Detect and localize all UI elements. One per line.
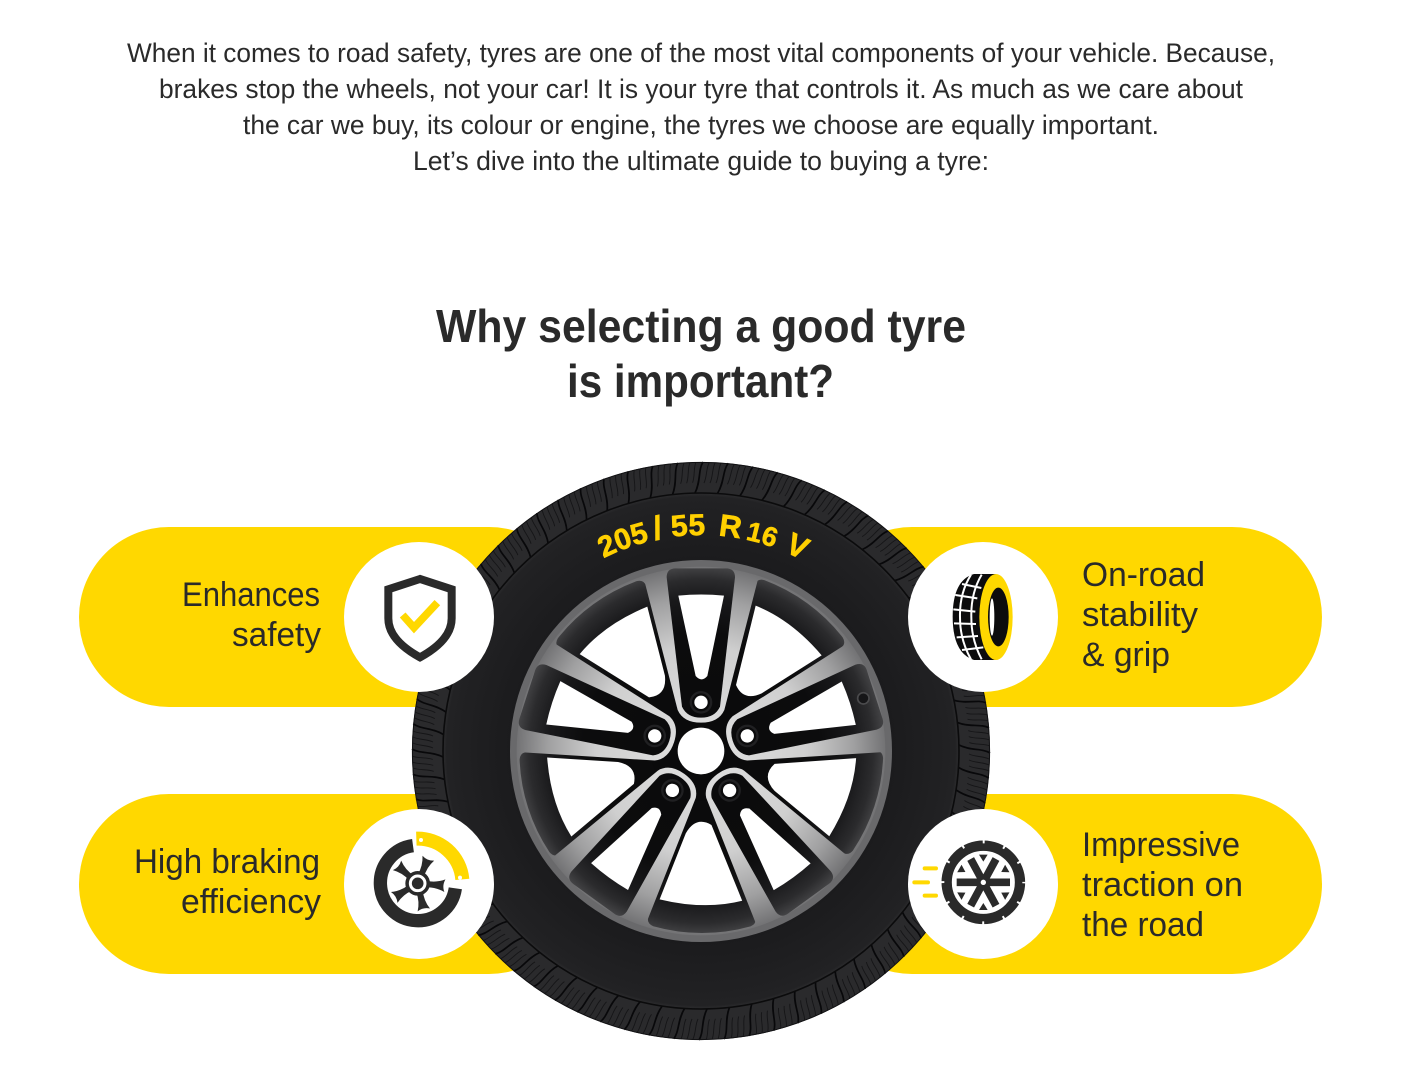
panel: impressive traction pill <box>822 794 1322 974</box>
label: impressive traction on the road: Impressive <box>1082 826 1240 864</box>
label: impressive traction on the road: traction on <box>1082 866 1243 904</box>
tyre illustration: 205/55 R16V <box>598 514 812 558</box>
intro paragraph <box>127 38 1275 176</box>
label: enhances safety: safety <box>232 616 321 654</box>
heading: is important? <box>567 355 834 407</box>
tyre tread <box>360 413 1026 1080</box>
label: on-road stability and grip <box>1082 556 1205 674</box>
icon circle: shield <box>344 542 494 692</box>
intro paragraph: the car we buy, its colour or engine, the tyres we choose are equally important. <box>243 110 1159 140</box>
label: high braking efficiency: efficiency <box>181 883 321 921</box>
label: high braking efficiency <box>134 843 321 921</box>
icon circle: tyre with yellow sidewall <box>908 542 1058 692</box>
label: high braking efficiency: High braking <box>134 843 320 881</box>
heading: Why selecting a good tyre <box>436 300 966 352</box>
alloy wheel <box>484 560 908 974</box>
label: on-road stability and grip: stability <box>1082 596 1198 634</box>
label: enhances safety: Enhances <box>182 576 320 614</box>
icon circle: brake disc <box>344 809 494 959</box>
icon circle: traction wheel <box>908 809 1058 959</box>
tyre size marking <box>485 535 917 751</box>
label: impressive traction on the road: the road <box>1082 906 1204 944</box>
label: on-road stability and grip: On-road <box>1082 556 1205 594</box>
intro paragraph: Let’s dive into the ultimate guide to buying a tyre: <box>413 146 989 176</box>
panel: on-road stability pill <box>822 527 1322 707</box>
label: on-road stability and grip: & grip <box>1082 636 1170 674</box>
intro paragraph: brakes stop the wheels, not your car! It is your tyre that controls it. As much as we care about <box>159 74 1244 104</box>
panel: enhances safety pill <box>79 527 579 707</box>
tyre illustration <box>412 462 990 1040</box>
panel: high braking efficiency pill <box>79 794 579 974</box>
label: impressive traction on the road <box>1082 826 1243 944</box>
tyre body <box>412 462 990 1040</box>
label: enhances safety <box>182 576 321 654</box>
intro paragraph: When it comes to road safety, tyres are one of the most vital components of your vehicle. Because, <box>127 38 1275 68</box>
heading <box>436 300 966 407</box>
